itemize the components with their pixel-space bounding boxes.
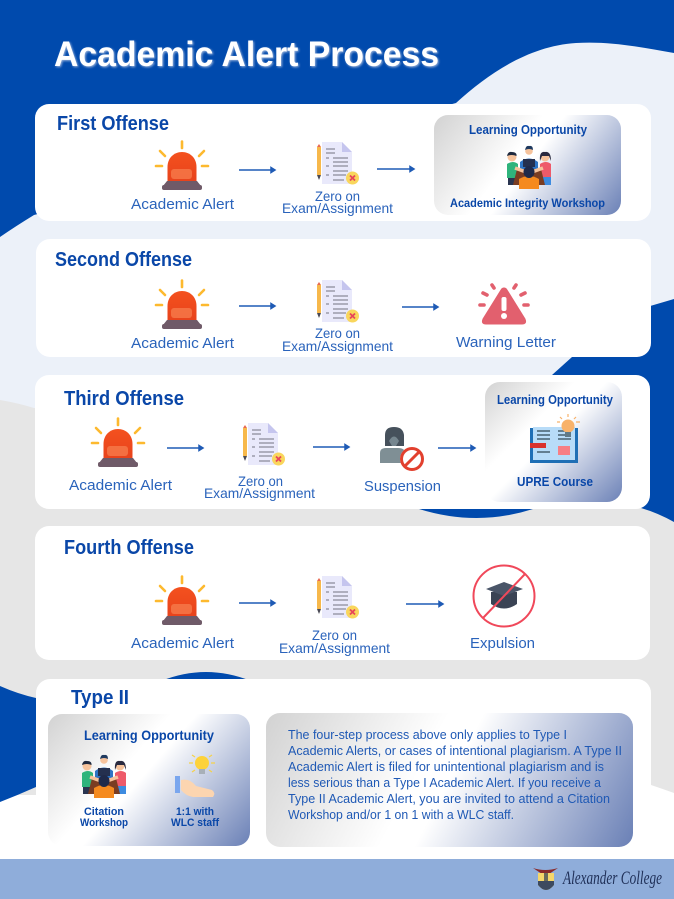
label xyxy=(279,627,390,656)
panel: third offense xyxy=(35,375,650,509)
icon: team around table xyxy=(507,146,551,189)
icon: zero document xyxy=(317,142,359,184)
box label: 1:1 with xyxy=(176,806,214,818)
learning opportunity box xyxy=(48,714,250,846)
icon: open book with bulb xyxy=(530,414,580,463)
icon: alarm siren xyxy=(92,418,144,467)
explanation text: Workshop and/or 1 on 1 with a WLC staff. xyxy=(288,808,514,822)
label: Zero on xyxy=(312,627,357,643)
card background xyxy=(36,679,651,859)
box label: Citation xyxy=(84,806,124,818)
box label xyxy=(171,806,219,829)
arrow xyxy=(313,444,349,450)
explanation text: less serious than a Type I Academic Alert. If you receive a xyxy=(288,776,601,790)
label: Academic Alert xyxy=(131,196,235,213)
label: Academic Alert xyxy=(131,635,235,652)
label: Exam/Assignment xyxy=(282,200,393,216)
box label: WLC staff xyxy=(171,817,219,829)
arrow xyxy=(377,166,414,172)
arrow xyxy=(167,446,203,450)
label: Academic Alert xyxy=(69,477,173,494)
panel: second offense xyxy=(36,239,651,357)
heading: Fourth Offense xyxy=(64,537,194,559)
icon: alarm siren xyxy=(156,142,208,190)
heading: Type II xyxy=(71,687,129,709)
label xyxy=(204,473,315,501)
card background xyxy=(35,104,651,221)
footer band xyxy=(0,859,674,899)
arrow xyxy=(406,602,443,606)
box heading: Learning Opportunity xyxy=(84,728,214,743)
explanation box xyxy=(266,713,633,847)
label: Zero on xyxy=(238,473,283,489)
label: Zero on xyxy=(315,325,360,341)
label: Academic Alert xyxy=(131,335,235,352)
explanation text: Academic Alerts, or cases of intentional plagiarism. A Type II xyxy=(288,744,622,758)
box heading: Learning Opportunity xyxy=(497,393,613,407)
label: Exam/Assignment xyxy=(279,640,390,656)
learning opportunity box xyxy=(485,382,622,502)
box label: Workshop xyxy=(80,817,128,829)
icon: prohibited graduation cap xyxy=(474,566,534,626)
arrow xyxy=(239,600,275,606)
explanation text xyxy=(288,728,622,822)
label: Expulsion xyxy=(470,635,535,652)
panel: first offense xyxy=(35,104,651,221)
icon: college crest xyxy=(533,868,558,890)
logo: Alexander College xyxy=(533,868,662,890)
arrow xyxy=(239,304,275,308)
label: Warning Letter xyxy=(456,334,556,351)
card background xyxy=(35,526,650,660)
label xyxy=(282,188,393,216)
label xyxy=(282,325,393,354)
icon: suspended person xyxy=(380,427,424,471)
heading: First Offense xyxy=(57,113,169,135)
explanation text: Academic Alert is filed for unintentional plagiarism and is xyxy=(288,760,604,774)
box label xyxy=(80,806,128,829)
explanation text: Type II Academic Alert, you are invited to attend a Citation xyxy=(288,792,610,806)
arrow xyxy=(239,168,275,172)
label: Exam/Assignment xyxy=(282,338,393,354)
panel: type II xyxy=(36,679,651,859)
icon: alarm siren xyxy=(156,576,208,625)
card background xyxy=(35,375,650,509)
box label: UPRE Course xyxy=(517,474,593,489)
label: Suspension xyxy=(364,478,441,495)
title: Academic Alert Process xyxy=(54,35,439,74)
icon: hand with light bulb xyxy=(175,755,215,797)
panel: fourth offense xyxy=(35,526,650,660)
heading: Second Offense xyxy=(55,249,192,271)
learning opportunity box xyxy=(434,115,621,215)
explanation text: The four-step process above only applies to Type I xyxy=(288,728,567,742)
arrow xyxy=(438,446,475,450)
icon: alarm siren xyxy=(156,280,208,329)
icon: warning triangle xyxy=(480,285,528,324)
icon: team around table xyxy=(82,755,126,798)
box heading: Learning Opportunity xyxy=(469,123,587,137)
card background xyxy=(36,239,651,357)
icon: zero document xyxy=(243,423,285,466)
label: Zero on xyxy=(315,188,360,204)
label: Exam/Assignment xyxy=(204,485,315,501)
icon: zero document xyxy=(317,576,359,618)
icon: zero document xyxy=(317,280,359,322)
box label: Academic Integrity Workshop xyxy=(450,198,605,210)
arrow xyxy=(402,304,438,310)
heading: Third Offense xyxy=(64,388,184,410)
